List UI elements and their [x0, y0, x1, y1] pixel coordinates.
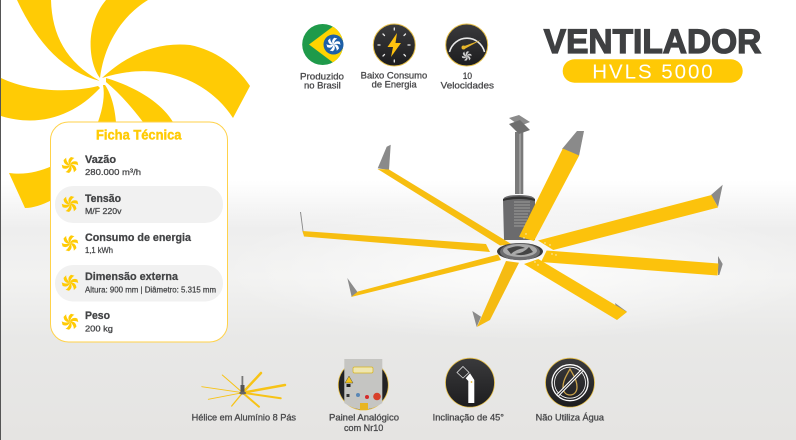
badge: produzido no brasil: Produzido: [300, 71, 344, 81]
spec: tensao: M/F 220v: [85, 206, 122, 216]
hub: [497, 243, 543, 260]
decorative sunburst fan: [1, 0, 250, 208]
panel: ficha tecnica: [50, 122, 228, 342]
badge: 10 velocidades: Velocidades: [441, 80, 495, 90]
feature: painel analogico: Painel Analógico: [329, 413, 399, 423]
spec: vazao: [61, 154, 141, 177]
badge: baixo consumo de energia: [361, 24, 427, 90]
icon: speedometer: [446, 24, 488, 66]
feature: painel analogico: [329, 359, 399, 433]
feature: helice em aluminio: Hélice em Alumínio 8 Pás: [192, 413, 297, 423]
feature: painel analogico: com Nr10: [344, 423, 383, 433]
blade tips: [300, 131, 723, 327]
spec: consumo de energia: 1,1 kWh: [85, 245, 113, 255]
title: VENTILADOR: [544, 23, 761, 61]
subtitle pill: [563, 59, 743, 83]
subtitle pill: HVLS 5000: [592, 60, 713, 83]
icon: control panel: [338, 359, 388, 410]
icon: brazil flag: [302, 24, 346, 65]
feature: inclinacao de 45: Inclinação de 45°: [433, 413, 504, 423]
blades: [302, 148, 718, 327]
feature: helice em aluminio: [192, 373, 297, 423]
spec: consumo de energia: Consumo de energia: [85, 232, 192, 244]
icon: small fan: [202, 373, 285, 407]
heading: ficha tecnica: Ficha Técnica: [96, 127, 182, 142]
spec: consumo de energia: [61, 232, 192, 255]
badge: 10 velocidades: 10: [463, 71, 472, 81]
spec: vazao: 280.000 m³/h: [85, 167, 141, 177]
badge: produzido no brasil: [300, 24, 346, 90]
bolts: [523, 233, 557, 266]
spec: dimensao externa: [61, 271, 216, 295]
spec: vazao: Vazão: [85, 154, 116, 166]
spec: tensao: Tensão: [85, 193, 121, 205]
spec: tensao: [61, 193, 122, 216]
feature: nao utiliza agua: Não Utiliza Água: [536, 413, 604, 423]
feature: inclinacao de 45: [433, 358, 504, 423]
ceiling mount and pole: [509, 115, 530, 194]
icon: tilt bracket: [446, 358, 494, 407]
spec: peso: 200 kg: [85, 324, 113, 334]
spec: dimensao externa: Dimensão externa: [85, 271, 179, 283]
badge: baixo consumo de energia: de Energia: [372, 80, 417, 90]
badge: baixo consumo de energia: Baixo Consumo: [361, 71, 427, 81]
feature: nao utiliza agua: [536, 358, 604, 423]
main fan illustration: [300, 115, 723, 327]
badge: produzido no brasil: no Brasil: [304, 80, 341, 90]
icon: no water: [546, 358, 594, 407]
icon: lightning bolt: [373, 24, 415, 66]
badge: 10 velocidades: [441, 24, 495, 90]
spec: peso: Peso: [85, 310, 110, 322]
spec: dimensao externa: Altura: 900 mm | Diâmetro: 5.315 mm: [85, 285, 216, 295]
motor housing: [503, 195, 535, 240]
spec: peso: [61, 310, 113, 334]
